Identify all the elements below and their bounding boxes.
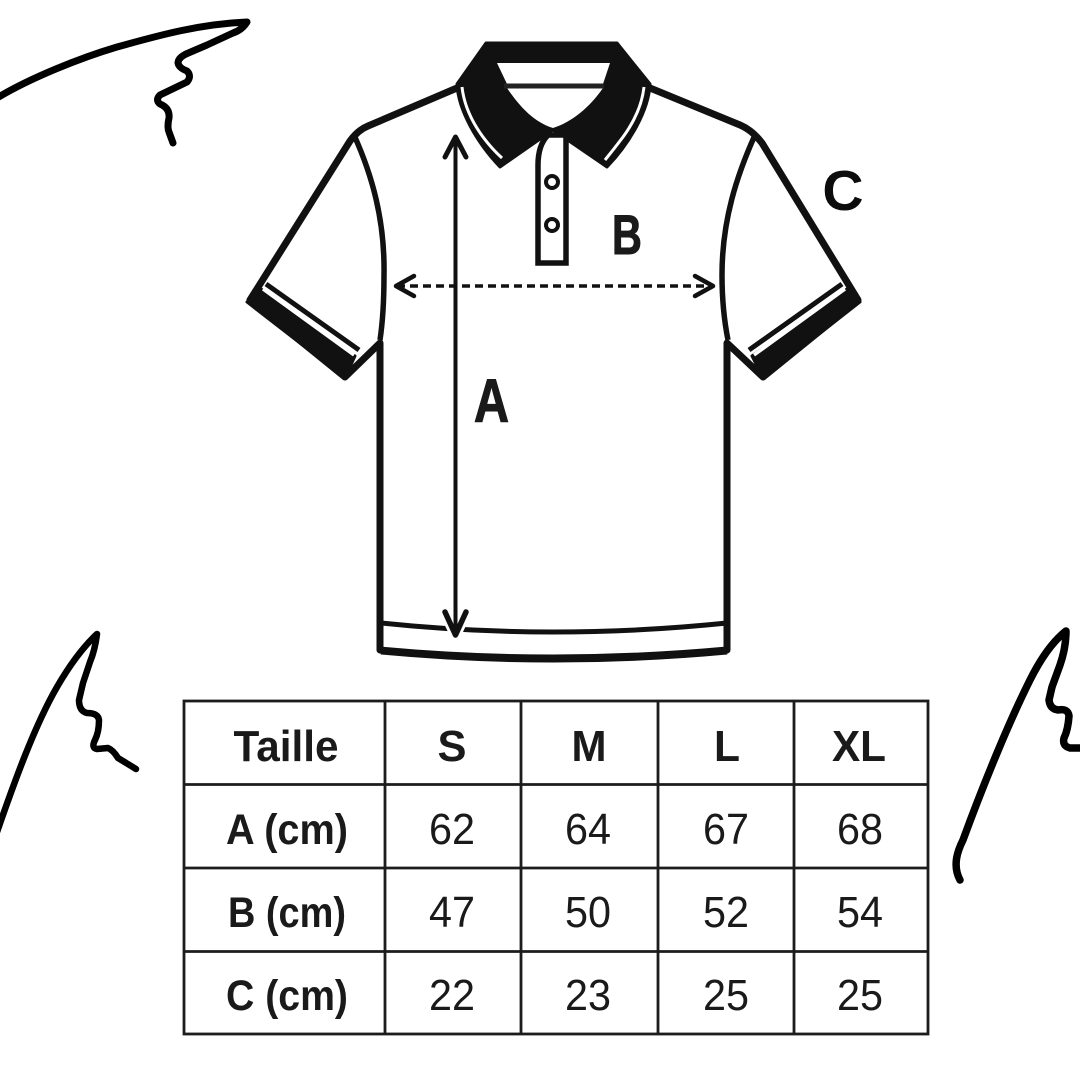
- row A: [226, 805, 883, 854]
- shirt body outline: [250, 88, 858, 658]
- hem line: [381, 623, 727, 632]
- polo shirt diagram: [247, 43, 864, 659]
- scribble: middle left: [0, 634, 136, 832]
- row C: [226, 971, 883, 1020]
- left sleeve seam: [354, 135, 384, 340]
- row C: 25: [703, 971, 749, 1020]
- size table: [184, 701, 928, 1034]
- header row: Taille: [234, 722, 338, 771]
- row A: A (cm): [226, 806, 348, 854]
- row B: [228, 888, 883, 937]
- row C: 22: [429, 971, 475, 1020]
- row C: C (cm): [226, 972, 348, 1020]
- header row: [234, 722, 886, 771]
- placket with buttons: [538, 135, 566, 263]
- right cuff: [749, 284, 860, 378]
- label A: A: [474, 367, 509, 435]
- label C: C: [822, 159, 864, 223]
- label B: B: [612, 204, 642, 267]
- right sleeve seam: [722, 135, 755, 340]
- collar: [457, 43, 650, 167]
- arrow B: chest width: [396, 276, 713, 296]
- row A: 67: [703, 805, 749, 854]
- scribble: top left: [0, 22, 247, 143]
- arrow A: length: [444, 137, 467, 636]
- table grid: [184, 701, 928, 1034]
- left cuff: [247, 284, 359, 378]
- row A: 64: [565, 805, 611, 854]
- row B: 52: [703, 888, 749, 937]
- row A: 68: [837, 805, 883, 854]
- row B: 54: [837, 888, 883, 937]
- scribble: middle right: [956, 631, 1080, 880]
- hem lower thick band: [381, 651, 727, 659]
- row B: 50: [565, 888, 611, 937]
- header row: M: [572, 722, 606, 771]
- row B: 47: [429, 888, 475, 937]
- row C: 25: [837, 971, 883, 1020]
- row B: B (cm): [228, 889, 346, 937]
- row A: 62: [429, 805, 475, 854]
- header row: XL: [832, 722, 886, 771]
- header row: L: [714, 722, 740, 771]
- row C: 23: [565, 971, 611, 1020]
- header row: S: [438, 722, 466, 771]
